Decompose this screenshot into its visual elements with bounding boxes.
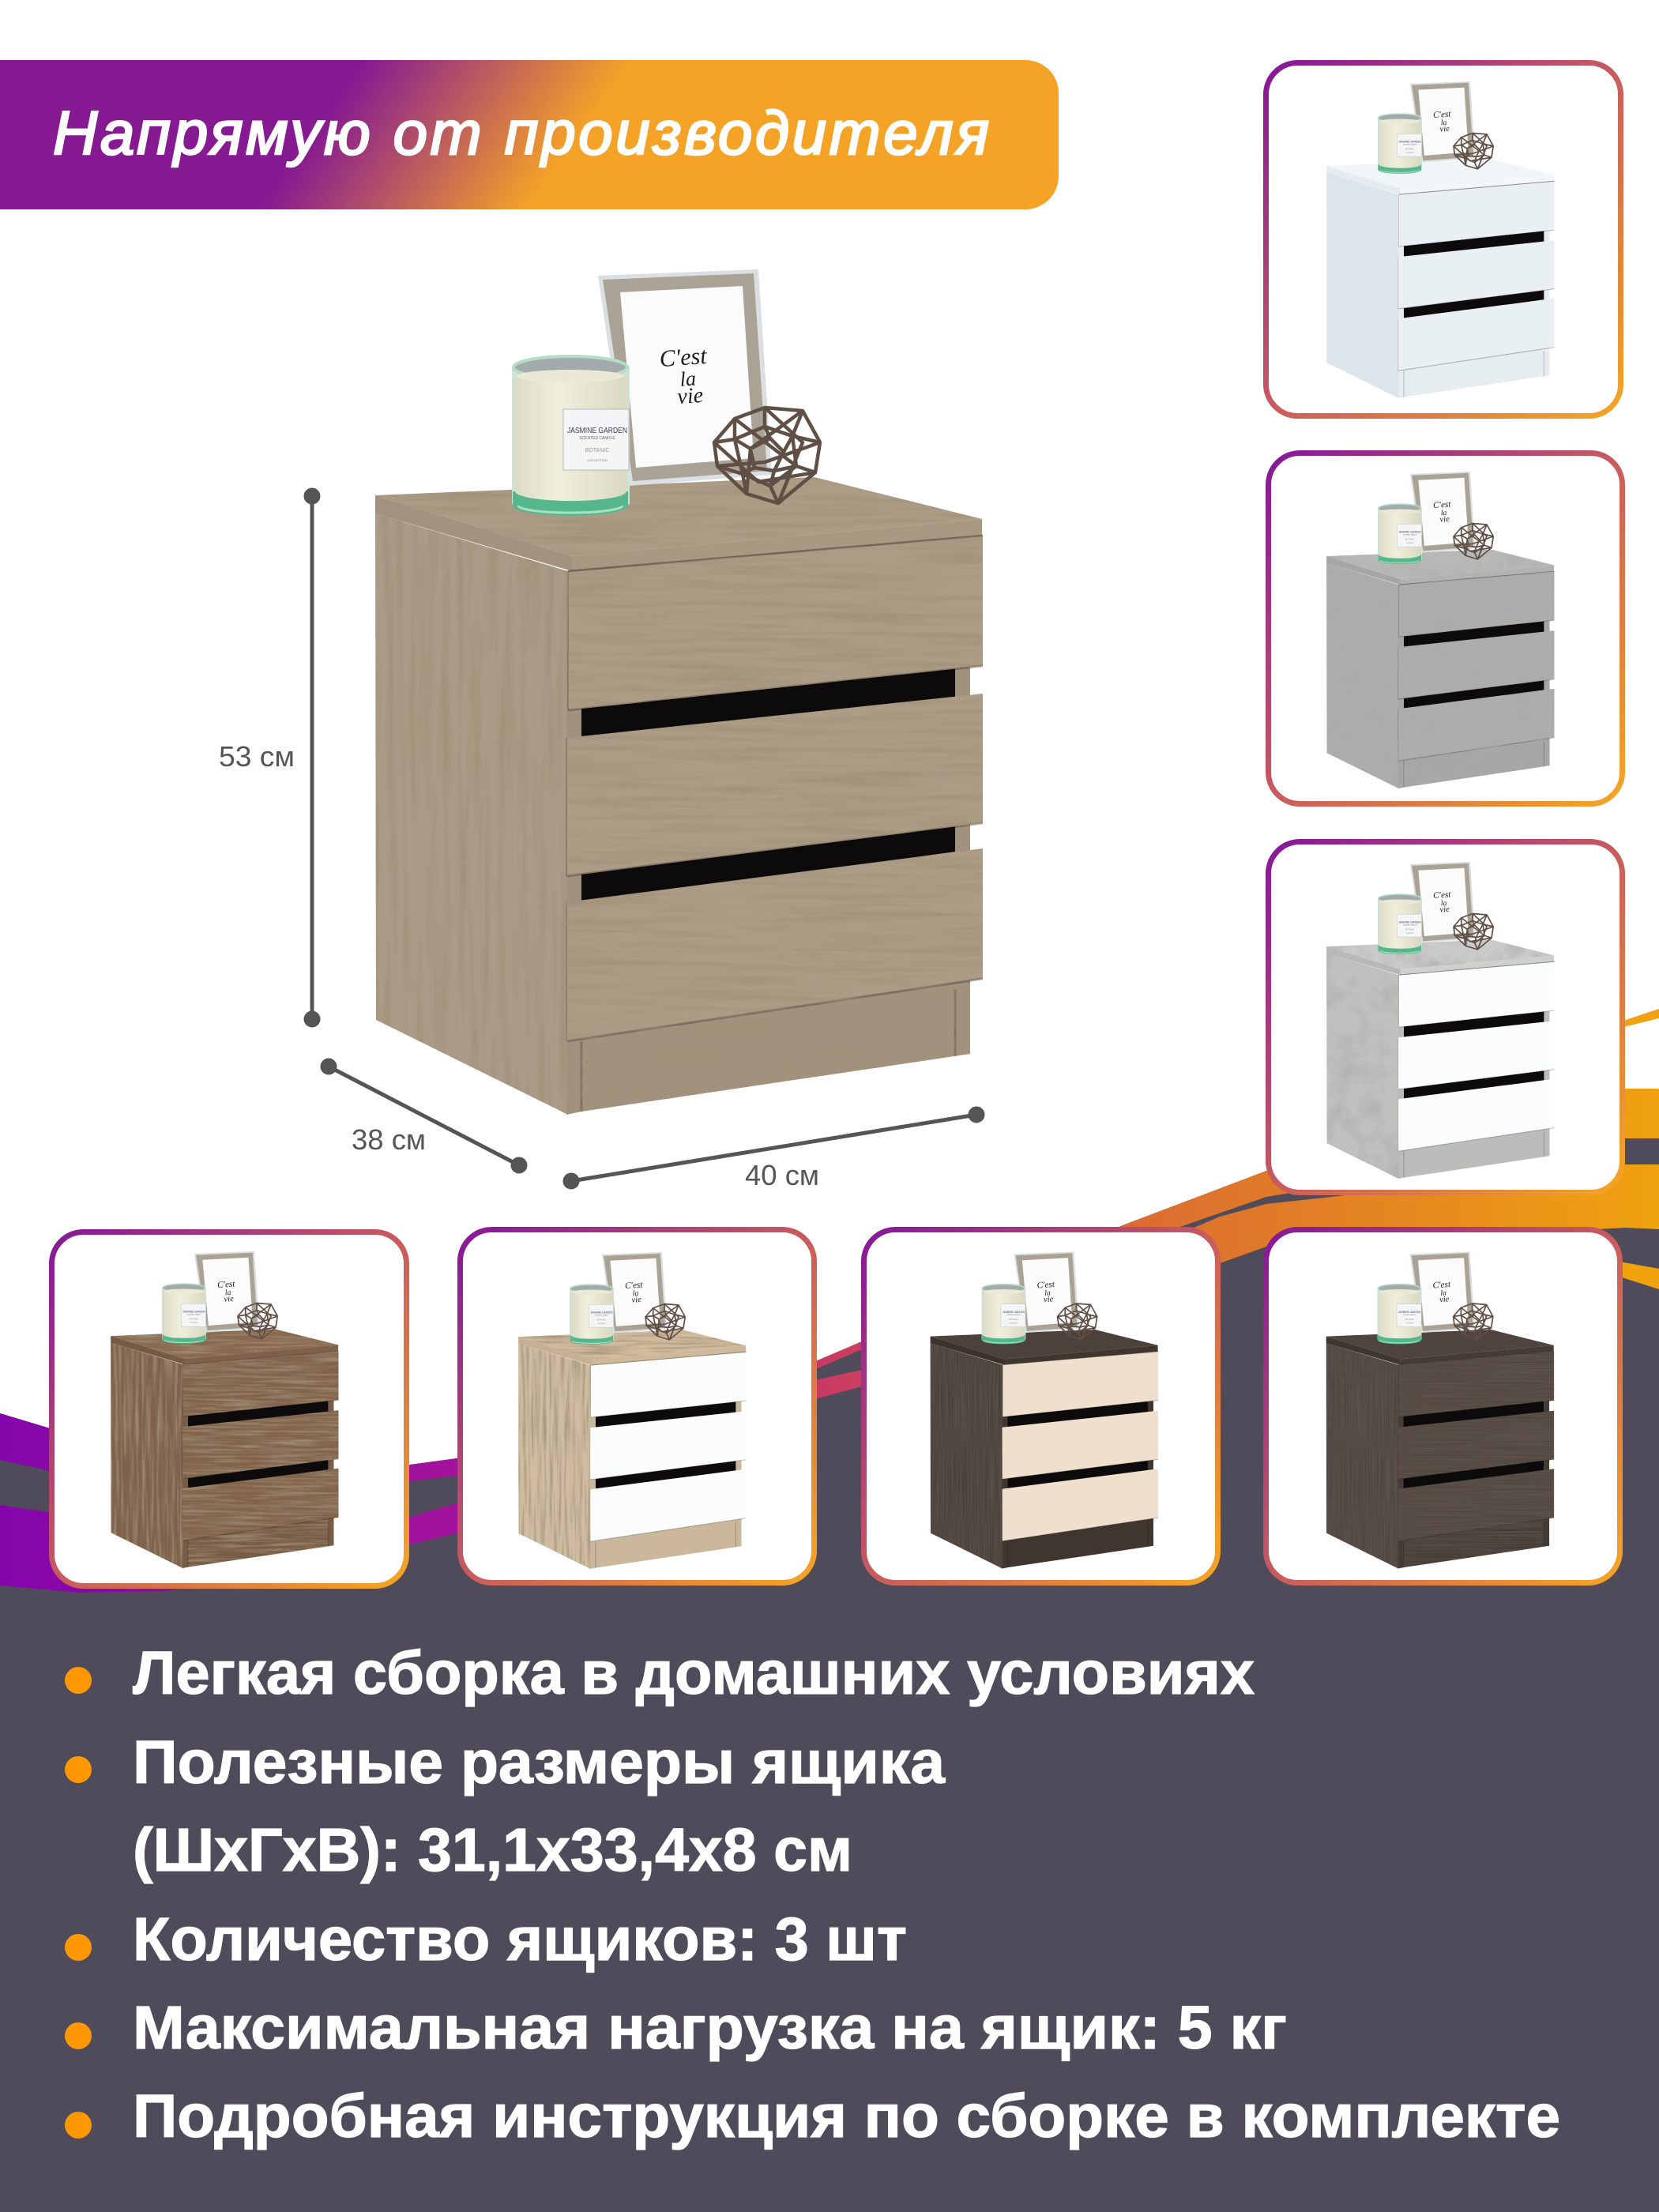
bullet 2 — [65, 1756, 92, 1783]
feature: maximum load: Максимальная нагрузка на ящик: 5 кг — [133, 1994, 1287, 2062]
icon: wenge nightstand — [1326, 1251, 1554, 1569]
depth line — [321, 1059, 527, 1173]
feature: easy assembly: Легкая сборка в домашних условиях — [133, 1639, 1255, 1707]
icon: dark oak nightstand — [111, 1251, 338, 1568]
card frame — [52, 1232, 406, 1586]
icon: wenge and cream nightstand — [931, 1251, 1158, 1569]
feature: drawer size line 2: (ШхГхВ): 31,1х33,4х8 см — [133, 1816, 852, 1884]
icon: concrete nightstand — [1326, 472, 1555, 788]
background: lower colour wave band — [0, 1164, 1659, 1593]
icon: white nightstand — [1326, 81, 1555, 398]
height label: 53 см — [219, 740, 295, 773]
width line — [563, 1107, 984, 1189]
depth label: 38 см — [352, 1123, 426, 1156]
dimension: depth — [321, 1059, 527, 1173]
card frame — [1266, 63, 1621, 416]
background: thin orange wave at right — [1620, 1262, 1659, 1289]
background: orange wedge at right — [1623, 1009, 1659, 1027]
card frame — [1269, 842, 1623, 1193]
panel: dark oak option — [52, 1232, 406, 1586]
bullet 4 — [65, 2022, 92, 2049]
bullet 5 — [65, 2112, 92, 2139]
bullet 1 — [65, 1667, 92, 1694]
panel: white option — [1266, 63, 1621, 416]
width label: 40 см — [745, 1159, 819, 1191]
banner — [0, 60, 1059, 209]
panel: wenge and cream option — [864, 1229, 1218, 1583]
feature list — [65, 1639, 1560, 2150]
main product: nightstand in sonoma oak — [375, 269, 983, 1115]
card frame — [864, 1229, 1218, 1583]
panel: light oak and white option — [460, 1229, 814, 1583]
panel: concrete and white option — [1269, 842, 1623, 1193]
title: Напрямую от производителя — [53, 98, 989, 167]
panel: concrete option — [1269, 453, 1623, 804]
banner background — [0, 60, 1059, 209]
icon: light oak and white nightstand — [518, 1252, 746, 1569]
panel: wenge option — [1266, 1229, 1620, 1583]
card frame — [460, 1229, 814, 1583]
icon: concrete and white nightstand — [1326, 862, 1555, 1179]
dimension: height — [219, 488, 320, 1027]
height line — [304, 488, 320, 1027]
dimension: width — [563, 1107, 984, 1191]
card frame — [1266, 1229, 1620, 1583]
feature: drawer size line 1: Полезные размеры ящика — [133, 1729, 946, 1796]
feature: number of drawers: Количество ящиков: 3 шт — [133, 1905, 907, 1973]
background: upper colour wave band — [0, 1089, 1659, 1501]
background: dark lower area — [0, 1089, 1659, 2212]
feature: instructions included: Подробная инструкция по сборке в комплекте — [133, 2082, 1560, 2150]
card frame — [1269, 453, 1623, 804]
bullet 3 — [65, 1934, 92, 1961]
